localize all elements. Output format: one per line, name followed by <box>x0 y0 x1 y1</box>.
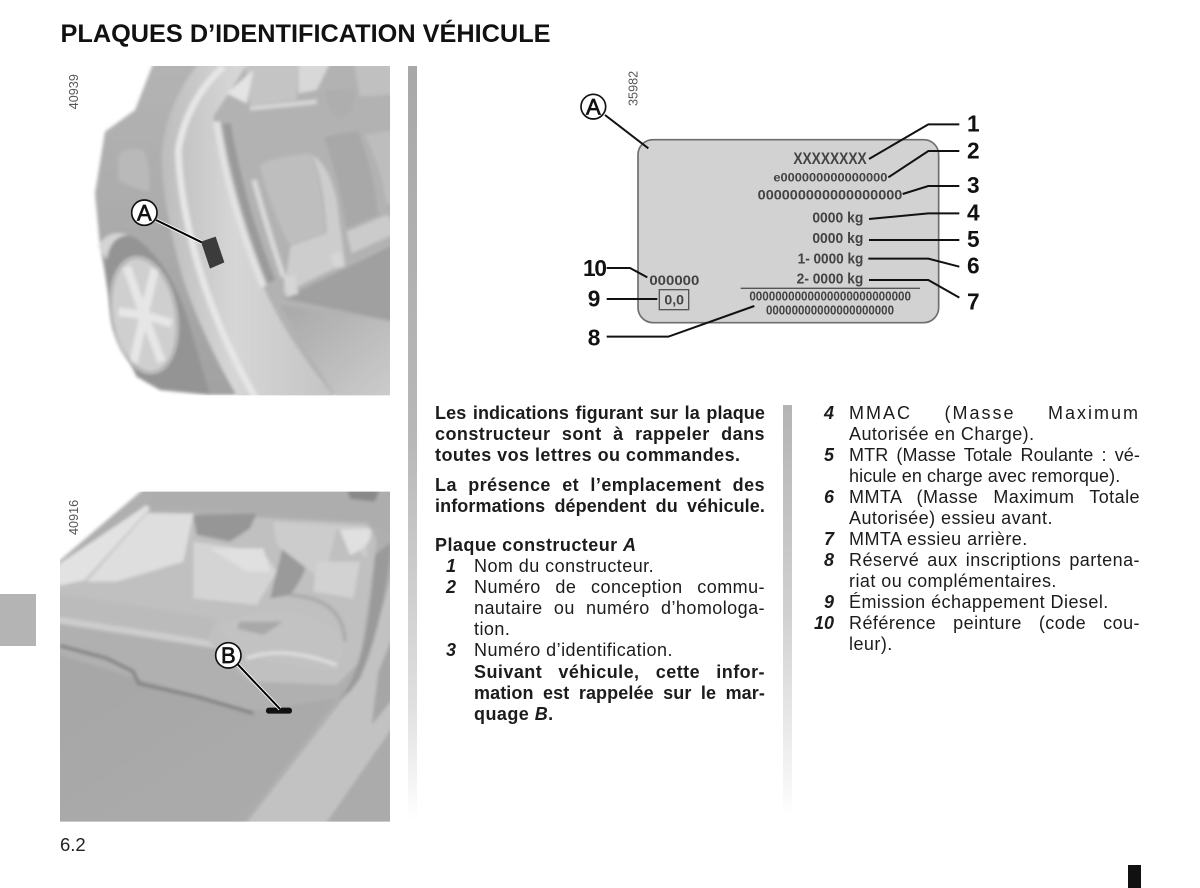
mirror mount <box>193 513 257 542</box>
diagram: manufacturer plate A: A <box>586 94 601 119</box>
marking B <box>266 708 292 714</box>
number labels: 1 <box>967 111 980 137</box>
text block: plate items 4 to 10: 9 <box>824 592 834 612</box>
number labels: 3 <box>967 172 980 198</box>
text block: plate items 1 to 3: 2 <box>446 577 456 597</box>
text block: intro notes: constructeur sont à rappeler dans <box>435 424 765 444</box>
fuel flap <box>119 150 148 190</box>
text block: plate items 1 to 3: Numéro d’identification. <box>474 640 673 660</box>
wheel arch <box>103 235 210 395</box>
text block: plate items 4 to 10: MMTA (Masse Maximum Totale <box>849 487 1140 507</box>
text block: plate items 1 to 3: nautaire ou numéro d’homologa- <box>474 598 765 618</box>
text block: plate items 4 to 10: 7 <box>824 529 834 549</box>
rear bench back <box>232 97 403 298</box>
text block: plate items 4 to 10: 6 <box>824 487 834 507</box>
photo: windscreen with marking B: B <box>221 643 236 668</box>
text block: intro notes: La présence et l’emplacement des <box>435 475 765 495</box>
floor and sill <box>287 246 390 320</box>
leader lines <box>605 115 959 337</box>
number labels: 6 <box>967 253 980 279</box>
plate text: 000000000000000000 <box>758 186 903 202</box>
text block: plate items 1 to 3: 3 <box>446 640 456 660</box>
vertical divider right <box>783 405 792 817</box>
text block: intro notes: Les indications figurant sur la plaque <box>435 403 765 423</box>
interior base <box>266 245 378 391</box>
text block: plate items 4 to 10: 5 <box>824 445 834 465</box>
corner marker <box>1128 865 1141 888</box>
text block: plate items 4 to 10: Référence peinture (code cou- <box>849 613 1140 633</box>
plate text: 0000000000000000000000000 <box>749 289 911 304</box>
car base <box>60 492 390 822</box>
plate text: 0,0 <box>664 291 684 307</box>
plate text: e000000000000000 <box>773 170 888 184</box>
diagram: manufacturer plate A: 35982 <box>627 71 641 106</box>
text block: plate items 4 to 10: leur). <box>849 634 893 654</box>
windscreen <box>47 512 376 685</box>
plate text: 0000 kg <box>812 231 863 247</box>
text block: plate items 1 to 3: tion. <box>474 619 510 639</box>
door pillar <box>162 66 335 396</box>
text block: plate items 1 to 3: mation est rappelée sur le mar- <box>474 683 765 703</box>
dash <box>47 592 217 642</box>
plate text: 2- 0000 kg <box>797 272 863 288</box>
text block: intro notes: toutes vos lettres ou commandes. <box>435 445 740 465</box>
plate text: XXXXXXXX <box>793 149 867 168</box>
page number: 6.2 <box>60 834 86 855</box>
number labels: 7 <box>967 289 980 315</box>
headrests <box>246 66 298 104</box>
number labels: 5 <box>967 226 980 252</box>
text block: plate items 4 to 10: hicule en charge avec remorque). <box>849 466 1120 486</box>
callout A <box>581 94 606 119</box>
body <box>93 66 238 396</box>
hood <box>60 660 61 663</box>
text block: intro notes <box>435 403 765 516</box>
photo: rear door pillar with plate A <box>69 66 390 396</box>
plate text: 1- 0000 kg <box>798 251 863 267</box>
text block: plate items 1 to 3: Plaque constructeur A <box>435 535 636 555</box>
text block: plate items 4 to 10: Réservé aux inscriptions partena- <box>849 550 1140 570</box>
title: PLAQUES D’IDENTIFICATION VÉHICULE <box>60 20 551 48</box>
number labels: 9 <box>588 285 600 311</box>
number labels: 4 <box>967 200 980 226</box>
plate text: 000000 <box>649 272 700 288</box>
text block: intro notes: informations dépendent du véhicule. <box>435 496 765 516</box>
photo: rear door pillar with plate A: A <box>137 200 152 225</box>
text block: plate items 4 to 10: MTR (Masse Totale Roulante : vé- <box>849 445 1140 465</box>
text block: plate items 1 to 3: Numéro de conception commu- <box>474 577 765 597</box>
photo: windscreen with marking B <box>60 492 390 822</box>
text block: plate items 4 to 10: MMAC (Masse Maximum <box>849 403 1140 423</box>
text block: plate items 1 to 3: 1 <box>446 556 456 576</box>
cowl <box>60 624 246 680</box>
plate text: 0000 kg <box>812 210 863 226</box>
vertical divider left <box>408 66 417 820</box>
text block: plate items 4 to 10: MMTA essieu arrière. <box>849 529 1028 549</box>
plate A location <box>201 237 224 269</box>
seats <box>193 542 277 605</box>
text block: plate items 1 to 3: Suivant véhicule, cette infor- <box>474 662 765 682</box>
wheel <box>110 256 178 374</box>
text block: plate items 4 to 10: 10 <box>814 613 834 633</box>
photo: windscreen with marking B: 40916 <box>67 500 81 535</box>
text block: plate items 1 to 3 <box>435 535 765 724</box>
side tab <box>0 594 36 646</box>
text block: plate items 1 to 3: Nom du constructeur. <box>474 556 654 576</box>
text block: plate items 4 to 10: Émission échappement Diesel. <box>849 592 1109 612</box>
A pillar and wing <box>248 580 390 822</box>
number labels: 10 <box>583 255 606 281</box>
text block: plate items 1 to 3: quage B. <box>474 704 554 724</box>
photo: rear door pillar with plate A: 40939 <box>67 74 81 109</box>
text block: plate items 4 to 10: Autorisée en Charge). <box>849 424 1035 444</box>
text block: plate items 4 to 10: riat ou complémentaires. <box>849 571 1057 591</box>
plate body <box>638 140 939 323</box>
wiper <box>60 646 253 713</box>
text block: plate items 4 to 10: Autorisée) essieu avant. <box>849 508 1053 528</box>
number labels <box>583 111 980 351</box>
plate text <box>649 149 911 317</box>
number labels: 2 <box>967 137 980 163</box>
number labels: 8 <box>588 325 600 351</box>
text block: plate items 4 to 10: 4 <box>824 403 834 423</box>
text block: plate items 4 to 10 <box>814 403 1140 654</box>
plate text: 00000000000000000000 <box>766 302 894 317</box>
text block: plate items 4 to 10: 8 <box>824 550 834 570</box>
roof <box>150 475 403 538</box>
